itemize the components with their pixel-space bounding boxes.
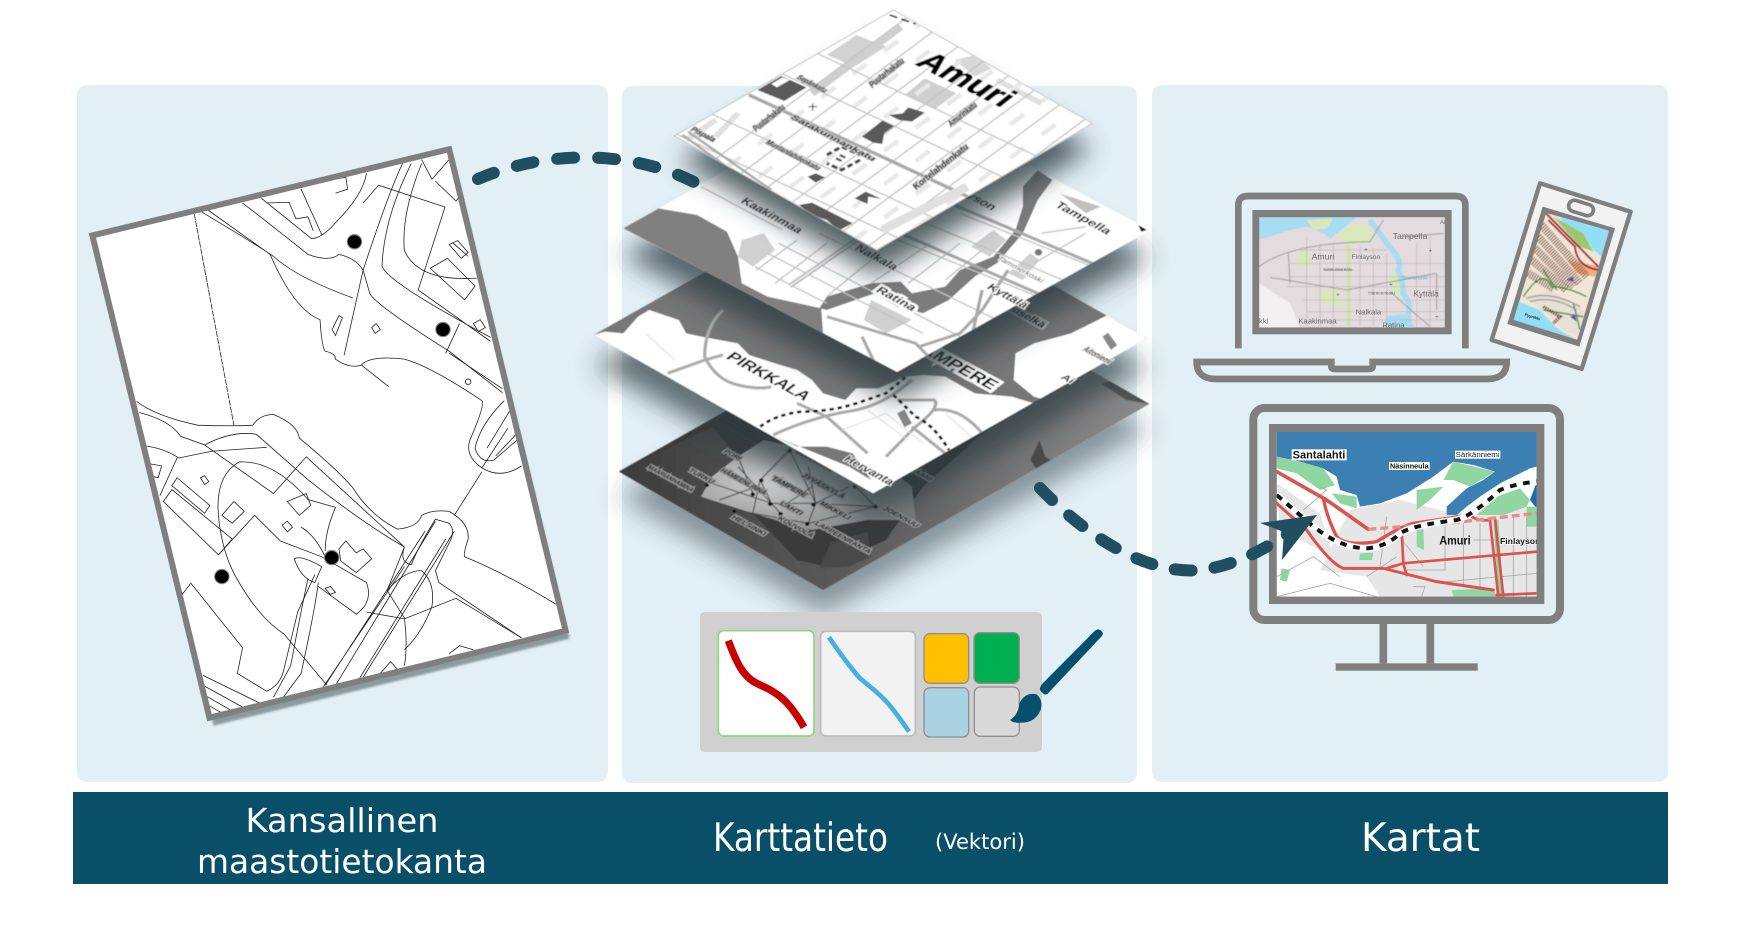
labels: cities: KOUVOLA	[776, 515, 817, 539]
labels: districts: Tammerkoski	[996, 255, 1046, 284]
layer 1: neighbourhood map	[670, 9, 1102, 292]
map: laptop screen: Kaakinmaa	[1298, 317, 1337, 326]
labels: cities: LAPPEENRANTA	[813, 520, 874, 555]
map: laptop screen: kki	[1259, 317, 1269, 326]
heading: karttatieto (vektori)	[713, 816, 1025, 861]
icon: phone with map	[1492, 183, 1631, 369]
labels: cities: LAHTI	[778, 500, 805, 517]
labels: places: Santalahti	[1293, 450, 1345, 462]
labels: districts	[738, 176, 1115, 313]
layer 3: regional map	[584, 272, 1157, 524]
labels: municipalities: TAMPERE	[907, 337, 1003, 392]
labels: streets and area name: Pispala	[689, 125, 719, 143]
labels: districts: Nalkala	[852, 243, 902, 272]
labels: cities: MAARIANHAMINA	[646, 464, 697, 493]
map: laptop screen: Finlayson	[1352, 254, 1380, 261]
labels: municipalities: Näsiselkä	[994, 298, 1049, 330]
icon: laptop with map	[1197, 196, 1507, 379]
map: laptop screen: Amuri	[1312, 251, 1334, 261]
labels: districts: Kaakinmaa	[738, 196, 806, 235]
map: laptop screen: +	[1364, 247, 1368, 254]
labels: streets and area name: Kortelahdenkatu	[911, 141, 970, 192]
map: laptop screen: +	[1429, 247, 1433, 254]
panel: kartat background	[1152, 85, 1668, 782]
labels: streets and area name: Puutarhakatu	[751, 102, 787, 134]
labels: cities	[646, 448, 935, 555]
heading: karttatieto (vektori): Karttatieto	[713, 816, 888, 861]
swatch: blue line style	[821, 631, 915, 736]
layer 2: city map	[613, 166, 1159, 416]
labels: municipalities	[722, 298, 1114, 487]
icon: map point markers	[215, 235, 450, 584]
swatch: red line style	[718, 631, 814, 736]
labels: cities: KAJAANI	[899, 461, 935, 482]
arrow: dashed curve from database to map data	[478, 157, 705, 188]
labels: cities: SEINÄJOKI	[794, 448, 835, 472]
heading: kansallinen maastotietokanta: Kansallinen	[246, 801, 438, 840]
map: laptop screen: Nalkala	[1356, 307, 1382, 316]
panel: style palette	[700, 612, 1103, 752]
heading: kansallinen maastotietokanta	[197, 801, 487, 881]
labels: cities: HÄMEENLINNA	[719, 467, 770, 496]
map: phone screen topographic	[1513, 212, 1609, 340]
map: laptop screen: Satakunnankatu	[1323, 267, 1352, 272]
map: laptop screen: Ratina	[1382, 320, 1405, 329]
labels: streets and area name: Mustanlahdenkatu	[764, 138, 824, 172]
labels: municipalities: Aitoniemi	[1080, 345, 1114, 366]
map: laptop screen: Tampella	[1393, 231, 1427, 241]
labels: cities: PORI	[722, 448, 744, 462]
labels: municipalities: PIRKKALA	[722, 349, 815, 404]
swatches: area colours	[924, 633, 1019, 737]
layer stack: map data layers	[594, 0, 1151, 615]
labels: streets and area name: Puutarhakatu	[867, 56, 906, 90]
icon: paint brush	[1010, 629, 1103, 723]
arrow: dashed curve from map data to maps	[1040, 488, 1317, 570]
labels: municipalities: Hervanta	[841, 454, 898, 487]
heading: karttatieto (vektori): (Vektori)	[935, 830, 1025, 854]
panel: karttatieto background	[622, 86, 1137, 783]
panel: kansallinen maastotietokanta background	[77, 85, 608, 782]
labels: places: Finlayson	[1500, 536, 1540, 546]
map: laptop screen	[1259, 217, 1456, 329]
labels: municipalities: Ai	[1058, 373, 1077, 386]
layer 4: country scale map	[612, 370, 1156, 612]
labels: districts: Finlayson	[937, 176, 1000, 213]
labels: places	[1292, 449, 1540, 547]
labels: cities: HELSINKI	[730, 514, 769, 537]
icon: desktop monitor with map	[1253, 408, 1560, 671]
labels: cities: JOENSUU	[881, 505, 922, 529]
map: laptop screen: Amuri	[1440, 220, 1456, 226]
map: laptop screen: +	[1435, 314, 1439, 321]
labels: streets and area name: Satakunnankatu	[789, 113, 879, 162]
labels: districts: Ratina	[873, 285, 920, 313]
labels: districts: Tampella	[1052, 200, 1115, 237]
map: monitor screen	[1277, 432, 1540, 597]
labels: cities: TAMPERE	[770, 475, 810, 498]
heading: kartat: Kartat	[1361, 816, 1480, 861]
title bar	[73, 792, 1668, 884]
labels: places: Näsinneula	[1390, 463, 1429, 470]
labels: streets and area name: Sepänkatu	[795, 73, 830, 94]
labels: streets and area name: Amuri	[908, 46, 1024, 113]
labels: cities: JYVÄSKYLÄ	[800, 472, 848, 500]
heading: kansallinen maastotietokanta: maastotietokanta	[197, 842, 487, 881]
labels: districts: Kyttälä	[984, 282, 1032, 310]
map: phone screen topographic: Pyynikki	[1524, 312, 1541, 321]
labels: cities: MIKKELI	[818, 500, 853, 521]
map: laptop screen: Hämeenkatu	[1368, 291, 1395, 296]
labels: streets and area name	[689, 46, 1024, 192]
map: laptop screen: Tammerkoski	[1402, 276, 1428, 281]
map: laptop screen: +	[1389, 282, 1393, 289]
labels: streets and area name: Amurinkatu	[946, 100, 979, 129]
map: laptop screen: Kyttälä	[1413, 288, 1439, 298]
map: laptop screen: +	[1336, 292, 1340, 299]
labels: places: Särkänniemi	[1456, 450, 1500, 459]
labels: places: Amuri	[1439, 534, 1471, 547]
base map: tilted terrain database sheet	[92, 149, 570, 726]
labels: cities: TURKU	[687, 467, 717, 485]
